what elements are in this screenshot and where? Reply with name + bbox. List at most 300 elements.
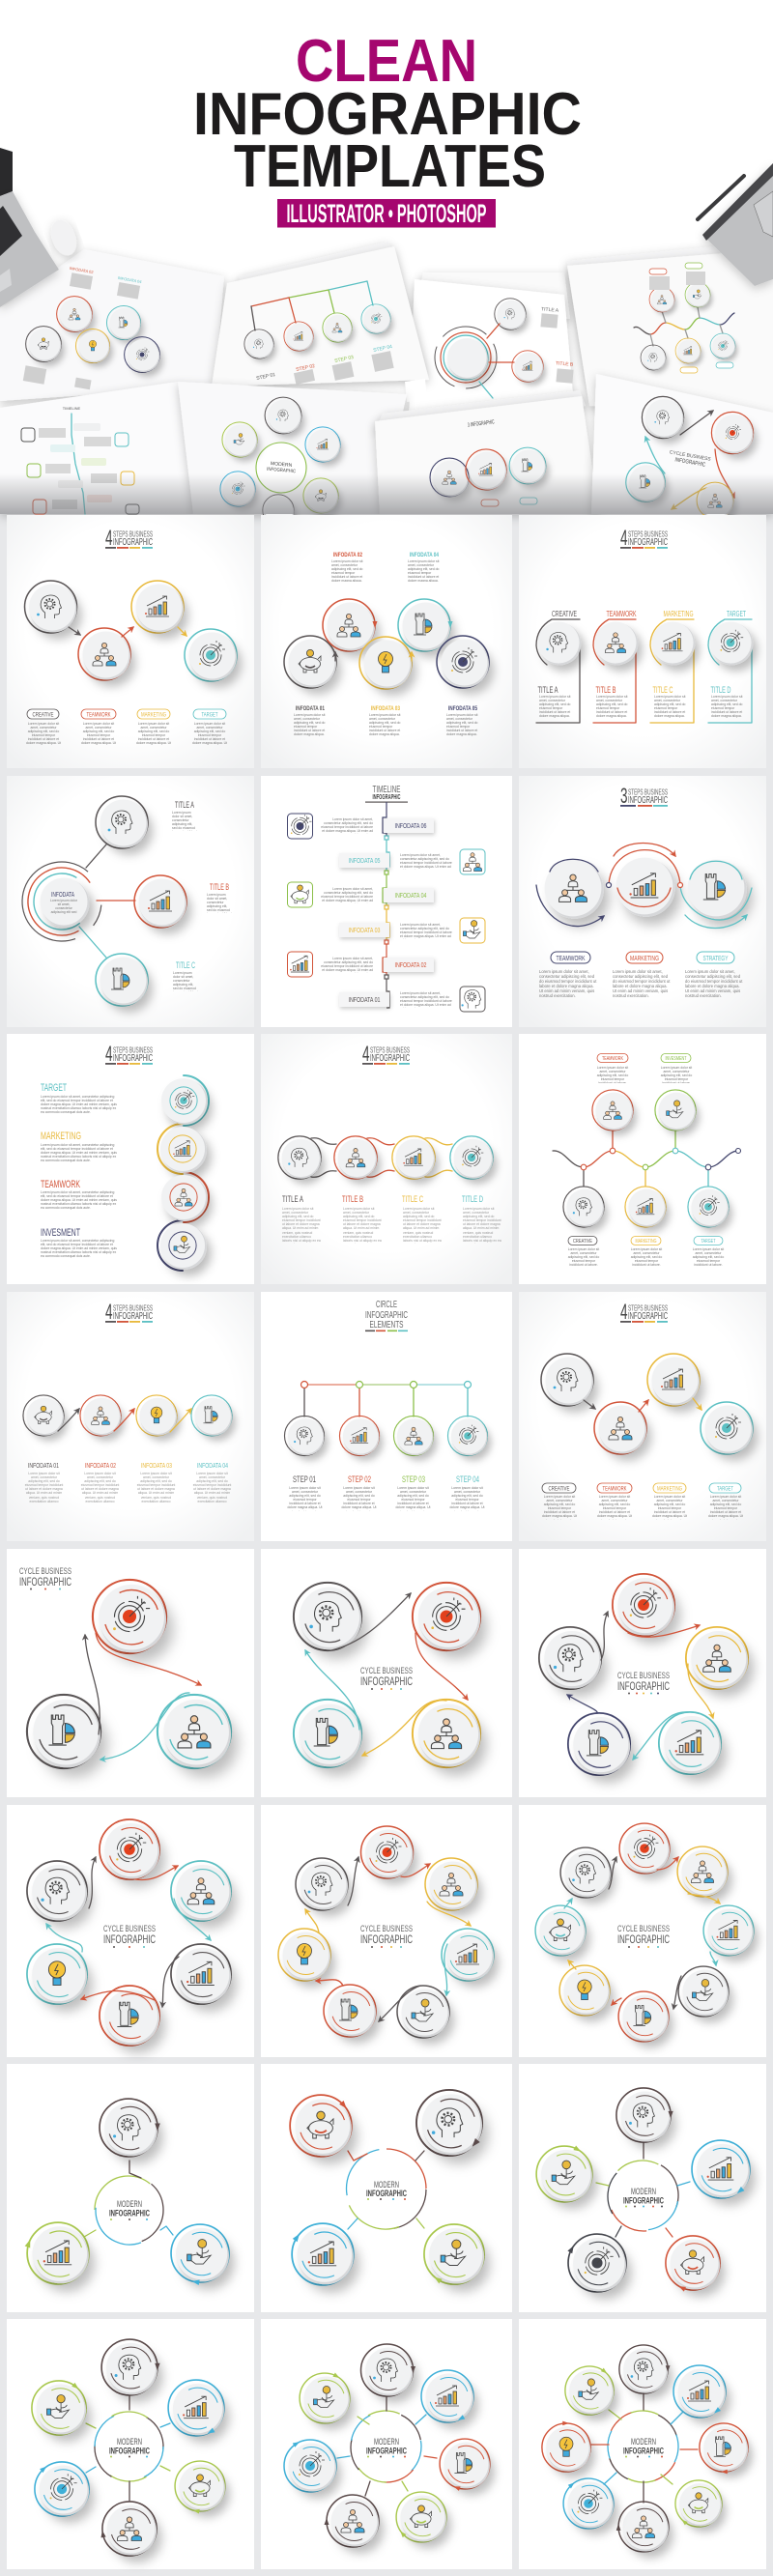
heading: modern infographic: INFOGRAPHIC	[366, 2189, 407, 2199]
circle: chart	[392, 1136, 435, 1179]
circle: tower	[27, 1695, 100, 1768]
circle: tower	[100, 1986, 159, 2046]
heading: cycle business infographic	[617, 1924, 670, 1948]
bracket: yellow	[650, 619, 694, 723]
titles: TITLE B	[342, 1194, 363, 1204]
step labels: STEP 01	[293, 1474, 316, 1484]
step labels: STEP 02	[348, 1474, 371, 1484]
titles	[28, 1461, 228, 1470]
panel background	[7, 1034, 254, 1284]
pill: target	[694, 1237, 723, 1245]
connector lines	[304, 1385, 468, 1417]
label: infodata 06: INFODATA 06	[394, 823, 427, 830]
circle: head	[619, 2345, 670, 2393]
panel: modern 5	[519, 2064, 766, 2312]
circle: head	[96, 796, 148, 848]
arrow 5	[81, 1990, 155, 2000]
label: infodata 06	[384, 818, 434, 833]
panel: wave tree	[519, 1034, 766, 1284]
circle: hand	[565, 2366, 614, 2415]
titles: INFODATA 03	[141, 1461, 172, 1470]
sheet: step line: STEP 02	[296, 363, 316, 373]
circle: tower	[96, 954, 148, 1006]
panel: cycle 7	[261, 1805, 512, 2057]
heading: cycle business infographic: CYCLE BUSINESS	[360, 1666, 413, 1675]
arrow 2	[401, 1864, 430, 1877]
title c: TITLE C	[176, 960, 195, 970]
circle: tower	[440, 2439, 490, 2491]
arrow: red	[639, 1400, 648, 1412]
icon box: piggy	[288, 882, 313, 907]
circle: piggy	[290, 2095, 352, 2157]
sheet: wave diagram	[567, 242, 773, 415]
arrow: yellow	[688, 1664, 713, 1718]
panel: five interlocking circles	[261, 515, 512, 768]
circle: team	[171, 1861, 231, 1921]
sheet: cycle business: CYCLE BUSINESS	[669, 449, 712, 463]
circle: chart	[160, 1127, 207, 1173]
pill: teamwork: TEAMWORK	[602, 1056, 623, 1062]
titles: INFODATA 01	[28, 1461, 59, 1470]
text: teamwork: Lorem ipsum dolor sit amet, consectetur adipiscing elit, sed do eiusmod tempor incididunt ut labore et dolore magna aliqua. Ut enim ad minim veniam, quis nostrud exercitation ullamco laboris nisi ut aliquip ex ea commodo consequat duis aute.	[41, 1190, 117, 1210]
laptop	[0, 148, 59, 307]
circle: chart	[25, 2222, 89, 2284]
circle: bulb	[136, 1395, 177, 1436]
heading: cycle business infographic	[103, 1924, 156, 1948]
circle: team	[425, 1858, 477, 1910]
sheet: cycle business	[591, 374, 773, 519]
pill: target	[709, 1483, 741, 1493]
circle: bulb	[542, 2421, 590, 2472]
panel: linked row	[261, 1034, 512, 1284]
sheet: timeline	[0, 382, 193, 514]
circle: tower	[398, 599, 452, 651]
heading: timeline infographic: INFOGRAPHIC	[373, 794, 400, 801]
heading: 4 steps business infographic: INFOGRAPHIC	[113, 1052, 153, 1064]
panel background	[519, 1034, 766, 1284]
heading: cycle business infographic: CYCLE BUSINESS	[360, 1924, 413, 1933]
titles: INFODATA 02	[85, 1461, 116, 1470]
heading: 4 steps business infographic: 4	[105, 526, 112, 550]
pill: creative: CREATIVE	[33, 713, 54, 719]
heading: modern infographic: MODERN	[631, 2437, 656, 2447]
arrow 6	[612, 1998, 621, 2005]
panel: modern 8	[519, 2319, 766, 2569]
pill: teamwork	[81, 709, 116, 719]
arrow: gray up	[334, 652, 336, 661]
heading: modern infographic	[366, 2180, 407, 2200]
column titles: TITLE B	[595, 685, 616, 695]
sheet: step line	[212, 242, 429, 402]
titles: INFODATA 04	[197, 1461, 228, 1470]
hero background	[0, 0, 773, 514]
heading: 4 steps business infographic	[105, 1042, 153, 1066]
heading: 4 steps business infographic	[362, 1042, 410, 1066]
heading: 3 steps business infographic: INFOGRAPHIC	[628, 794, 668, 806]
panel: modern 7	[261, 2319, 512, 2569]
pill: marketing	[137, 709, 170, 719]
heading: 4 steps business infographic	[620, 526, 668, 550]
circle: target	[35, 2462, 89, 2516]
circle: head	[25, 581, 77, 633]
panel background	[261, 2064, 512, 2312]
circle: team	[334, 1136, 377, 1179]
circle: chart	[442, 1929, 494, 1981]
arrow 3	[688, 1894, 720, 1903]
titles: TITLE C	[402, 1194, 423, 1204]
pill: target: TARGET	[701, 1239, 716, 1245]
circle: chart	[659, 1712, 721, 1774]
circle: piggy	[175, 2461, 225, 2514]
step labels	[293, 1474, 479, 1484]
panel background	[261, 1549, 512, 1797]
circle: team	[677, 1846, 728, 1897]
circle: team	[594, 621, 638, 665]
circle: chart	[647, 1354, 700, 1406]
circle: head	[284, 1416, 325, 1456]
column labels: TEAMWORK	[607, 610, 637, 618]
circle: target	[701, 1402, 753, 1454]
heading: modern infographic: INFOGRAPHIC	[623, 2447, 664, 2456]
label: infodata 04	[384, 888, 434, 902]
panel background	[519, 2319, 766, 2569]
title: infodata 02: INFODATA 02	[333, 552, 362, 558]
circle: bulb	[359, 637, 412, 689]
panel: modern 6	[7, 2319, 254, 2569]
label: infodata 03	[339, 923, 389, 937]
bottom shading fade	[0, 473, 773, 514]
banner: illustrator photoshop: ILLUSTRATOR • PHOTOSHOP	[286, 199, 487, 228]
arrow 4	[444, 1944, 447, 1995]
heading: 4 steps business infographic: 4	[620, 1300, 628, 1324]
text: invesment: Lorem ipsum dolor sit amet, consectetur adipiscing elit, sed do eiusmod tempor incididunt ut labore et dolore magna aliqua. Ut enim ad minim veniam, quis nostrud exercitation ullamco laboris nisi ut aliquip ex ea commodo consequat duis aute.	[41, 1239, 117, 1258]
circle: team	[323, 599, 377, 651]
arrow 8	[564, 1899, 572, 1908]
arrow 5	[673, 1976, 681, 2009]
pill: creative	[568, 1237, 597, 1245]
pill: marketing: MARKETING	[657, 1486, 682, 1492]
circle: head	[563, 1187, 604, 1227]
panel: four circles row with arrows	[7, 1292, 254, 1541]
sheet: timeline: TIMELINE	[63, 406, 81, 411]
title b: TITLE B	[210, 882, 229, 892]
panel background	[519, 2064, 766, 2312]
circle: piggy	[284, 636, 336, 688]
arrow: red	[415, 1633, 468, 1700]
arrow: teal	[305, 1650, 359, 1730]
circle: bulb	[27, 1944, 87, 2004]
circle: head	[27, 1861, 87, 1921]
arrow 4	[710, 1952, 716, 1965]
circle: head	[100, 2099, 160, 2157]
text block B: Lorem ipsum dolor sit amet, consectetur adipiscing elit, sed do eiusmod tempor incididunt ut labore et dolore magna aliqua.	[596, 695, 627, 718]
heading: 4 steps business infographic: STEPS BUSINESS	[113, 530, 153, 539]
heading: 4 steps business infographic: INFOGRAPHIC	[628, 536, 668, 548]
bracket: teal	[708, 619, 752, 723]
nodes	[301, 1382, 472, 1388]
arrow: navy	[567, 1695, 597, 1713]
circle: hand	[678, 1966, 729, 2017]
sheet: step line: STEP 03	[334, 355, 355, 364]
circle: team	[592, 1090, 633, 1131]
heading: modern infographic: INFOGRAPHIC	[623, 2195, 664, 2207]
circle: target	[567, 2234, 626, 2292]
circle: hand	[32, 2381, 86, 2435]
connector nodes	[607, 883, 682, 887]
label: infodata 04: INFODATA 04	[394, 893, 427, 900]
panel: four columns with brackets	[519, 515, 766, 768]
circle: chart	[292, 2223, 354, 2285]
circle: target	[619, 1823, 670, 1874]
panel background	[261, 1034, 512, 1284]
step labels: STEP 04	[456, 1474, 479, 1484]
title: infodata 03: INFODATA 03	[371, 705, 400, 712]
center rings	[334, 2138, 437, 2241]
disc: tower	[688, 860, 747, 919]
sheet: step line: STEP 01	[256, 372, 276, 382]
title: teamwork: TEAMWORK	[41, 1179, 80, 1190]
pill: teamwork: TEAMWORK	[603, 1486, 626, 1492]
arrow 6	[46, 1924, 82, 1952]
pill: marketing	[626, 952, 663, 963]
wave nodes	[581, 1148, 740, 1170]
circle: bulb	[278, 1929, 330, 1981]
panel background	[519, 1805, 766, 2057]
circle: team	[413, 1700, 480, 1767]
panel: cycle 8	[519, 1805, 766, 2057]
panel background	[7, 2064, 254, 2312]
heading: 3 steps business infographic: 3	[620, 784, 628, 808]
heading: modern infographic: MODERN	[374, 2437, 399, 2447]
heading: 4 steps business infographic: STEPS BUSINESS	[628, 530, 668, 539]
circle: team	[80, 1395, 121, 1436]
heading: 4 steps business infographic: 4	[620, 526, 628, 550]
heading: modern infographic: MODERN	[117, 2199, 142, 2209]
circle: team	[157, 1695, 231, 1768]
text block 3: Lorem ipsum dolor sit amet, consectetur adipiscing elit, sed do eiusmod tempor incididunt ut labore et dolore magna aliqua. Ut enim ad minim veniam, quis nostrud exercitation.	[685, 969, 742, 998]
outer arcs	[157, 1075, 209, 1271]
circle: target	[161, 1078, 208, 1125]
circle: chart	[692, 2140, 750, 2198]
panel: 3 steps	[519, 776, 766, 1027]
arrow: gray	[69, 627, 80, 635]
circle: team	[78, 628, 130, 680]
circle: piggy	[23, 1395, 64, 1436]
titles: TITLE A	[282, 1194, 303, 1204]
panel background	[519, 515, 766, 768]
heading: cycle business infographic: INFOGRAPHIC	[360, 1674, 413, 1688]
panel background	[261, 2319, 512, 2569]
circle: hand	[160, 1223, 207, 1270]
column labels: MARKETING	[663, 610, 694, 618]
heading: cycle business infographic: CYCLE BUSINESS	[19, 1566, 72, 1576]
column labels: TARGET	[727, 610, 746, 618]
icon box: hand	[460, 918, 485, 943]
heading: modern infographic: INFOGRAPHIC	[109, 2447, 150, 2456]
circle: tower	[191, 1395, 232, 1436]
panel: 4 steps arrows	[7, 515, 254, 768]
panel: cycle 4	[261, 1549, 512, 1797]
sheet: modern infographic: MODERN	[271, 461, 293, 469]
circle: tower	[700, 2423, 748, 2474]
panel: modern 4	[261, 2064, 512, 2312]
bracket: gray	[536, 619, 580, 723]
pill: teamwork: TEAMWORK	[87, 713, 110, 719]
circle: team	[100, 2502, 157, 2556]
panel background	[7, 1292, 254, 1541]
circle: hand	[424, 2224, 484, 2284]
panel: hub with three branches	[7, 776, 254, 1027]
column titles: TITLE D	[711, 685, 731, 695]
banner: illustrator photoshop	[277, 199, 496, 228]
pill: target: TARGET	[201, 713, 218, 719]
pill: marketing	[631, 1237, 661, 1245]
circle: chart	[339, 1416, 380, 1456]
center rings	[82, 2162, 177, 2257]
panel background	[261, 1292, 512, 1541]
circle: target	[613, 1574, 674, 1636]
circle: head	[101, 2339, 160, 2395]
arrow: gray	[584, 1400, 595, 1409]
circle: head	[539, 1627, 601, 1689]
circle: head	[560, 1847, 611, 1898]
heading: modern infographic: MODERN	[117, 2437, 142, 2447]
circle: tower	[568, 1713, 630, 1775]
circle: piggy	[535, 1905, 586, 1956]
pill: target	[193, 709, 226, 719]
circle: target	[437, 636, 489, 688]
arrow 6	[316, 1980, 343, 1986]
circle: target	[709, 621, 753, 665]
disc: team	[545, 860, 604, 919]
pill: target: TARGET	[717, 1486, 733, 1492]
connectors	[79, 844, 135, 958]
circle: chart	[421, 2370, 473, 2422]
column titles: TITLE A	[537, 685, 558, 695]
arrow: teal	[100, 1693, 189, 1760]
text block 2: Lorem ipsum dolor sit amet, consectetur adipiscing elit, sed do eiusmod tempor incididunt ut labore et dolore magna aliqua. Ut enim ad minim veniam, quis nostrud exercitation.	[613, 969, 670, 998]
panel background	[261, 1805, 512, 2057]
circle: hand	[655, 1090, 696, 1131]
sheet: four circles	[0, 249, 224, 401]
arrow 2	[135, 1866, 178, 1880]
circle: chart	[651, 621, 695, 665]
text: marketing: Lorem ipsum dolor sit amet, consectetur adipiscing elit, sed do eiusmod tempor incididunt ut labore et dolore magna aliqua. Ut enim ad minim veniam, quis nostrud exercitation ullamco laboris nisi ut aliquip ex ea commodo consequat duis aute.	[41, 1143, 117, 1162]
heading: 4 steps business infographic: INFOGRAPHIC	[370, 1052, 410, 1064]
heading: modern infographic	[366, 2437, 407, 2458]
heading: 3 steps business infographic: STEPS BUSINESS	[628, 787, 668, 796]
circle: head	[278, 1136, 321, 1179]
pill: marketing	[653, 1483, 686, 1493]
arrow 5	[379, 1986, 420, 2021]
circle: target	[185, 629, 237, 681]
circle: piggy	[666, 2236, 720, 2292]
circle: head	[294, 1583, 361, 1650]
title line: TEMPLATES: TEMPLATES	[234, 133, 546, 200]
heading: 4 steps business infographic	[105, 1300, 153, 1324]
pill: creative	[27, 709, 59, 719]
hub title: INFODATA	[51, 890, 74, 899]
label: infodata 03: INFODATA 03	[348, 928, 381, 934]
circle: hand	[171, 2224, 229, 2285]
heading: modern infographic: MODERN	[374, 2180, 399, 2190]
sheet: four circles: INFODATA 04	[118, 275, 143, 284]
step labels: STEP 03	[402, 1474, 425, 1484]
heading: modern infographic	[623, 2437, 664, 2458]
text rows	[320, 817, 453, 1008]
panel background	[7, 776, 254, 1027]
icon box: chart	[288, 952, 313, 977]
heading: circle infographic elements: INFOGRAPHIC	[365, 1310, 408, 1321]
circle: chart	[171, 1944, 231, 2004]
circle: team	[686, 1627, 748, 1689]
disc: chart	[616, 858, 675, 917]
circle: target	[100, 1819, 159, 1879]
circle: tower	[294, 1700, 361, 1767]
heading: modern infographic	[109, 2199, 150, 2220]
circle: chart	[703, 1905, 754, 1956]
sheet: modern infographic	[178, 382, 407, 526]
panel background	[7, 1805, 254, 2057]
heading: timeline infographic	[365, 785, 408, 803]
title: marketing: MARKETING	[41, 1131, 81, 1142]
heading: 4 steps business infographic: STEPS BUSINESS	[628, 1302, 668, 1312]
circle: target	[93, 1580, 166, 1653]
timeline line	[383, 802, 389, 1008]
circle: tower	[324, 1985, 376, 2037]
circle: hand	[300, 2373, 350, 2423]
circle: piggy	[675, 2480, 722, 2527]
panel background	[7, 515, 254, 768]
pill: marketing: MARKETING	[636, 1239, 657, 1245]
pill: teamwork	[551, 952, 590, 963]
label: infodata 01: INFODATA 01	[348, 997, 381, 1004]
circle: chart	[625, 1187, 666, 1227]
circle: chart	[134, 875, 186, 928]
titles	[282, 1194, 483, 1204]
circle: piggy	[396, 2492, 446, 2542]
column titles	[537, 685, 731, 695]
heading: cycle business infographic	[360, 1666, 413, 1690]
label: infodata 02: INFODATA 02	[394, 962, 427, 969]
panel background	[519, 1549, 766, 1797]
sheet: radial diagram, back layer: TITLE B	[556, 360, 574, 368]
circle: target	[361, 1826, 414, 1878]
sheet: four circles: INFODATA 02	[70, 266, 95, 274]
heading: cycle business infographic: INFOGRAPHIC	[19, 1575, 72, 1589]
arrow: gray	[85, 1635, 100, 1734]
connectors	[596, 2142, 690, 2237]
heading: cycle business infographic: INFOGRAPHIC	[617, 1679, 670, 1693]
connectors	[84, 2161, 173, 2237]
panel background	[7, 1549, 254, 1797]
heading: circle infographic elements	[365, 1300, 408, 1331]
arrow: yellow	[362, 1701, 446, 1756]
arrow 7	[568, 1961, 576, 1969]
title line: CLEAN: CLEAN	[296, 28, 477, 95]
heading: cycle business infographic: INFOGRAPHIC	[360, 1932, 413, 1946]
panel: hero header with title and desk scene	[0, 0, 773, 526]
icon box: head	[460, 987, 485, 1012]
column labels	[552, 610, 746, 618]
arrow: red	[122, 627, 133, 637]
icon box: team	[460, 849, 485, 874]
heading: 3 steps business infographic	[620, 784, 668, 808]
sheet: cycle business: INFOGRAPHIC	[674, 457, 706, 469]
circle: team	[393, 1416, 434, 1456]
circle: team	[594, 1402, 646, 1454]
circle: bulb	[559, 1965, 610, 2016]
